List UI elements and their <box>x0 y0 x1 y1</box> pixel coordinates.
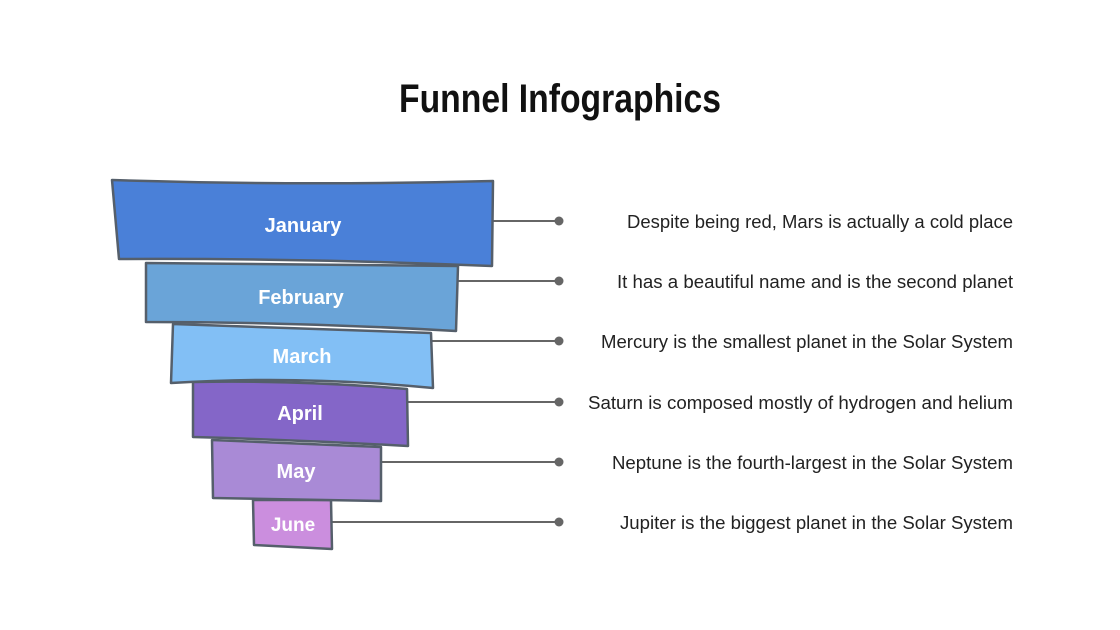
layer: June <box>253 500 332 549</box>
title: Funnel Infographics <box>399 77 721 121</box>
funnel <box>112 180 564 549</box>
layer: March <box>171 324 433 388</box>
descriptions: Jupiter is the biggest planet in the Solar System <box>620 513 1013 533</box>
layer: May: May <box>277 461 316 483</box>
layer: February: February <box>258 287 345 309</box>
descriptions: Mercury is the smallest planet in the Solar System <box>601 332 1013 352</box>
layer: January <box>112 180 493 266</box>
descriptions: Saturn is composed mostly of hydrogen and helium <box>588 393 1013 413</box>
layer: April <box>193 382 408 446</box>
layer: January: January <box>265 215 342 237</box>
descriptions: It has a beautiful name and is the second planet <box>617 272 1013 292</box>
layer: June: June <box>271 515 315 536</box>
layer: April: April <box>277 403 323 425</box>
descriptions: Despite being red, Mars is actually a cold place <box>627 212 1013 232</box>
descriptions <box>588 212 1013 533</box>
layer: May <box>212 440 381 501</box>
layer: March: March <box>273 346 331 368</box>
descriptions: Neptune is the fourth-largest in the Solar System <box>612 453 1013 473</box>
connector lines <box>331 216 564 526</box>
layer: February <box>146 263 458 331</box>
